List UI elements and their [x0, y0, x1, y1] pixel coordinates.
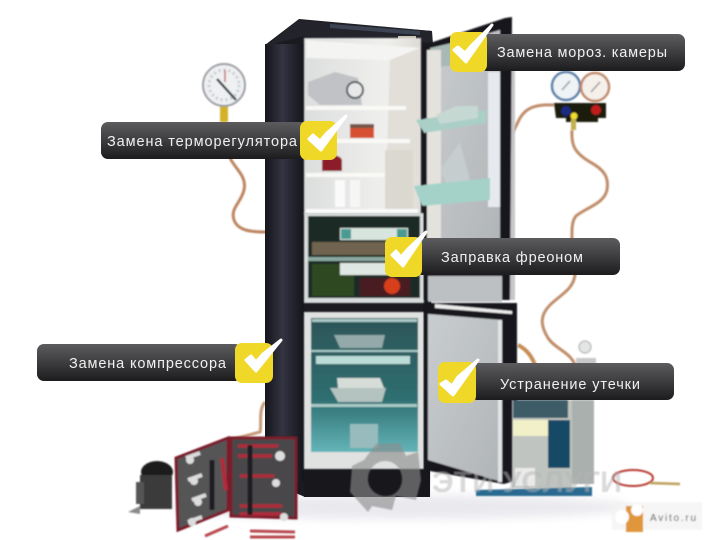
middle drawer compartment	[304, 213, 424, 303]
label: compressor replacement: Замена компрессора	[69, 356, 227, 372]
icon: tool case	[176, 438, 296, 537]
red hose	[613, 470, 680, 486]
icon: yellow check	[450, 25, 492, 72]
icon: yellow check	[235, 340, 281, 383]
label: thermostat replacement: Замена терморегулятора	[107, 134, 298, 150]
icon: yellow check	[385, 232, 426, 277]
label: leak repair: Устранение утечки	[500, 377, 640, 393]
icon: refrigerant station	[476, 341, 596, 496]
lower door	[424, 303, 517, 484]
freezer compartment	[304, 312, 424, 469]
fridge body	[265, 19, 433, 497]
copper hose: compressor	[222, 402, 265, 442]
icon: yellow check	[300, 116, 346, 160]
watermark: avito badge	[612, 502, 702, 532]
icon: pressure gauge	[203, 64, 245, 122]
copper hose: manifold to cylinder	[542, 130, 607, 368]
shelf items	[308, 72, 362, 105]
copper hose: left gauge	[230, 158, 266, 232]
icon: yellow check	[438, 360, 478, 403]
refrigerator	[265, 17, 517, 497]
label: freezer replacement: Замена мороз. камеры	[497, 45, 667, 61]
icon: manifold gauges	[552, 72, 609, 130]
callout: freon refill	[385, 232, 620, 277]
callout: freezer replacement	[450, 25, 685, 72]
watermark: avito badge: Avito.ru	[650, 513, 696, 524]
copper hose: manifold to fridge	[512, 105, 554, 134]
watermark: service text: ЭТИ УСЛУГИ	[432, 466, 622, 499]
upper door	[414, 17, 515, 302]
icon: compressor	[128, 461, 173, 514]
callout: compressor replacement	[37, 340, 281, 383]
watermark: gear logo	[350, 443, 421, 512]
copper hose: lower branch	[518, 345, 536, 368]
floor shadow	[170, 495, 630, 519]
callout: thermostat replacement	[101, 116, 346, 160]
callout: leak repair	[438, 360, 674, 403]
label: freon refill: Заправка фреоном	[441, 250, 583, 266]
upper fridge compartment	[304, 38, 421, 214]
